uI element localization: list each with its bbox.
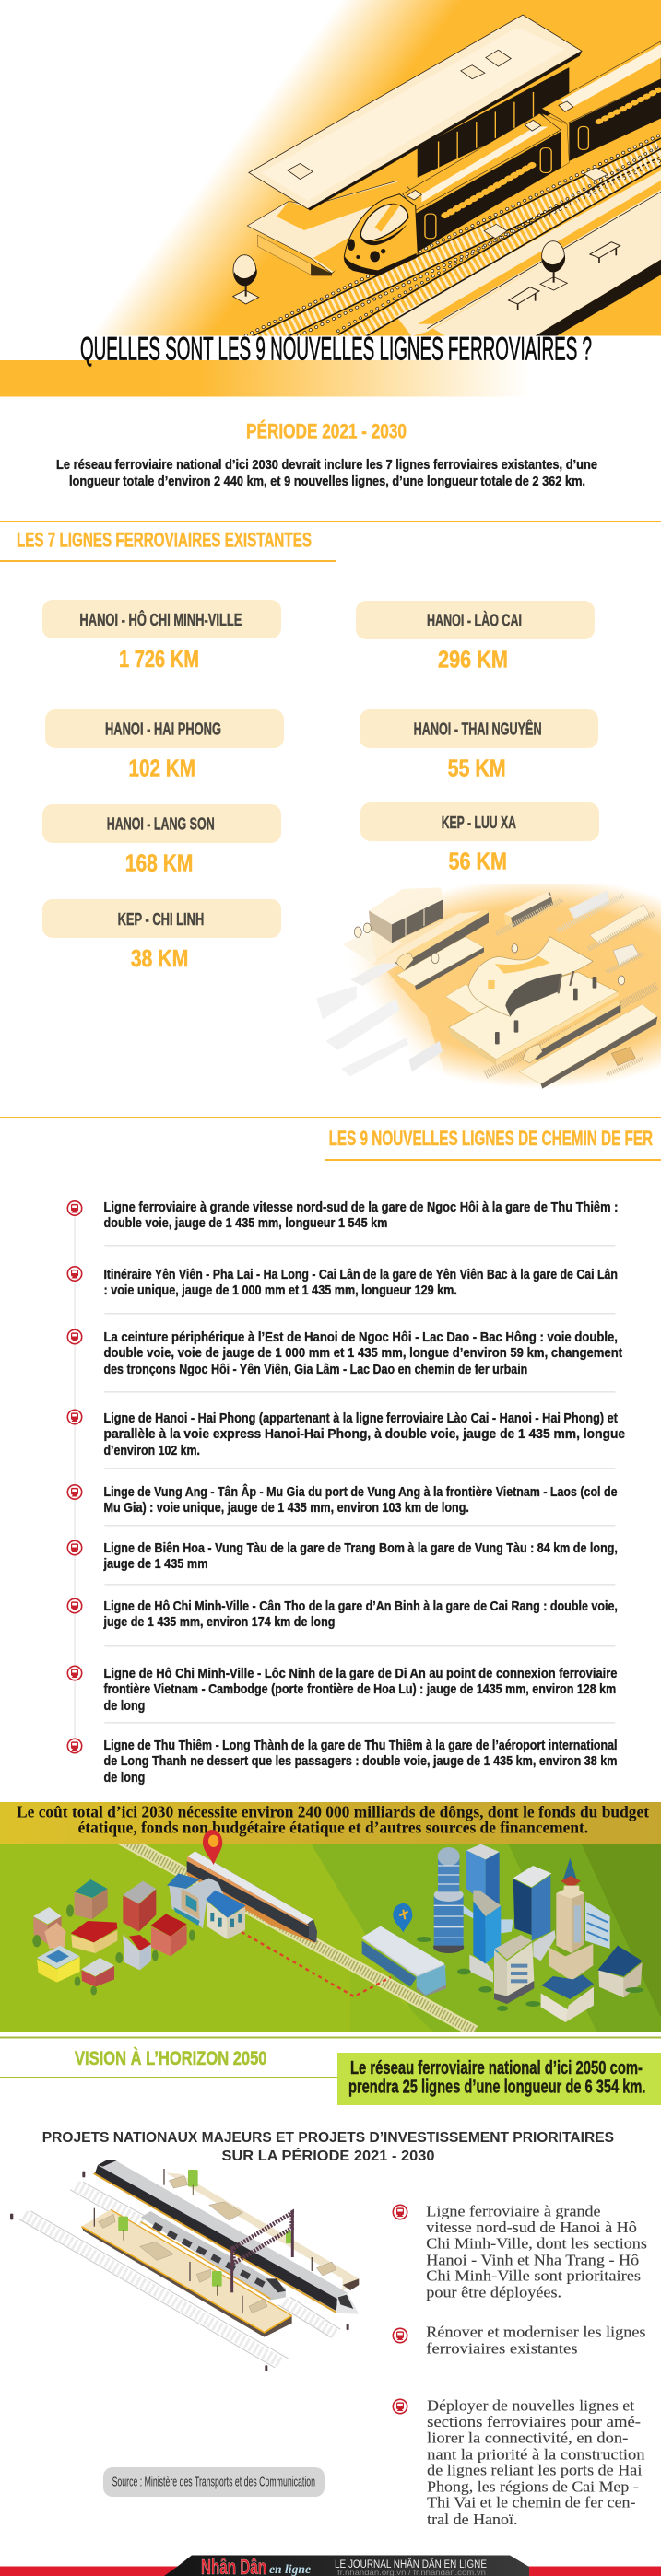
card: Hanoi - Hô Chi Minh-Ville: 1 726 KM [119,645,199,673]
heading: priority projects [42,2130,614,2164]
card: Hanoi - Thai Nguyên: HANOI - THAI NGUYÊN [414,719,542,739]
vision 2050 callout [337,2053,661,2105]
card: Hanoi - Hô Chi Minh-Ville [42,600,281,673]
card: Kep - Chi Linh [42,899,281,972]
bullet 1: Hanoi - Vinh et Nha Trang - Hô [426,2252,639,2268]
card: Hanoi - Lào Cai: 296 KM [438,646,508,673]
cost banner: Le coût total d’ici 2030 nécessite environ 240 000 milliards de dôngs, dont le fonds du budget [17,1802,649,1821]
footer [0,2555,661,2576]
card: Hanoi - Lang Son [42,804,281,877]
intro text [56,458,597,489]
card: Kep - Luu Xa: 56 KM [448,848,507,875]
bullet 2: Rénover et moderniser les lignes [426,2324,645,2340]
list item 3: des tronçons Ngoc Hôi - Yên Viên, Gia Lâm - Lac Dao en chemin de fer urbain [103,1362,527,1377]
card: Hanoi - Hai Phong: 102 KM [129,755,195,782]
list item 6 [67,1540,618,1572]
bullet 3: Déployer de nouvelles lignes et [427,2397,634,2415]
decorative gradient band under title [0,360,661,396]
bullet 3: sections ferroviaires pour amé- [427,2413,641,2430]
bullet 3: tral de Hanoï. [427,2511,518,2528]
card: Hanoi - Lang Son: HANOI - LANG SON [107,815,215,834]
list item 9 [67,1738,618,1786]
source pill [103,2467,325,2497]
list item 2: : voie unique, jauge de 1 000 mm et 1 435 mm, longueur 129 km. [103,1282,457,1298]
city station illustration [304,884,661,1096]
card: Hanoi - Lào Cai [356,601,595,673]
card: Hanoi - Hai Phong: HANOI - HAI PHONG [105,720,221,739]
bullet 3: nant la priorité à la construction [427,2446,645,2464]
bullet 1 [393,2202,647,2301]
bullet 3: liorer la connectivité, en don- [427,2430,629,2447]
bullet 3: de lignes reliant les ports de Hai [427,2462,643,2479]
heading: existing lines: LES 7 LIGNES FERROVIAIRES EXISTANTES [17,529,312,551]
list item 1 [67,1200,618,1231]
bullet 1: pour être déployées. [426,2283,561,2301]
card: Hanoi - Lang Son: 168 KM [125,849,193,877]
bullet 2: ferroviaires existantes [426,2339,577,2357]
source pill: Source : Ministère des Transports et des Communication [112,2475,315,2489]
bullet 3 [393,2397,645,2528]
cost banner: étatique, fonds non budgétaire étatique et d’autres sources de financement. [78,1819,588,1837]
green panel illustration: city to station [0,1802,661,2032]
list item 7 [67,1598,618,1630]
list item 1: double voie, jauge de 1 435 mm, longueur 1 545 km [103,1215,387,1231]
list item 9: de long [103,1770,145,1786]
list item 7: juge de 1 435 mm, environ 174 km de long [103,1614,335,1630]
footer text: LE JOURNAL NHÂN DÂN EN LIGNE [335,2558,487,2570]
bullet 2 [393,2324,645,2357]
card: Hanoi - Hai Phong [45,709,284,782]
heading: priority projects: SUR LA PÉRIODE 2021 - 2030 [221,2147,435,2164]
card: Kep - Luu Xa [360,802,599,875]
list item 4: d’environ 102 km. [103,1443,200,1458]
list item 5: Mu Gia) : voie unique, jauge de 1 435 mm, environ 103 km de long. [103,1500,469,1516]
card: Hanoi - Hô Chi Minh-Ville: HANOI - HÔ CHI MINH-VILLE [79,610,242,629]
bullet 3: Phong, les régions de Cai Mep - [427,2478,639,2496]
list item 3 [67,1329,622,1377]
bullet 1: Ligne ferroviaire à grande [426,2202,601,2219]
list item 4 [67,1410,625,1458]
illustration: two trains at platforms [10,2160,359,2371]
list timeline: 9 new lines [67,1200,625,1786]
card: Kep - Luu Xa: KEP - LUU XA [442,814,516,832]
heading: priority projects: PROJETS NATIONAUX MAJEURS ET PROJETS D’INVESTISSEMENT PRIORITAIRES [42,2130,614,2146]
period heading: PÉRIODE 2021 - 2030 [246,420,407,442]
card: Hanoi - Thai Nguyên: 55 KM [448,755,506,782]
bullet 1: vitesse nord-sud de Hanoi à Hô [426,2219,637,2236]
heading: vision 2050: VISION À L’HORIZON 2050 [75,2048,267,2069]
list item 6: jauge de 1 435 mm [103,1556,208,1572]
footer text [335,2558,487,2576]
bullet 3: Thi Vai et le chemin de fer cen- [427,2494,636,2512]
cost banner [0,1802,661,1844]
hero illustration: train station [94,0,661,335]
list item 5 [67,1483,618,1516]
card: Kep - Chi Linh: 38 KM [131,944,188,972]
list item 8: de long [103,1698,145,1714]
list item 4: parallèle à la voie express Hanoi-Hai Phong, à double voie, jauge de 1 435 mm, longue [103,1426,625,1442]
card: Hanoi - Thai Nguyên [360,709,598,782]
list item 2 [67,1267,618,1298]
bullet 1: Chi Minh-Ville sont prioritaires [426,2267,641,2285]
card: Hanoi - Lào Cai: HANOI - LÀO CAI [427,611,522,630]
card: Kep - Chi Linh: KEP - CHI LINH [118,910,204,929]
intro text: Le réseau ferroviaire national d’ici 2030 devrait inclure les 7 lignes ferroviaires existantes, d’une [56,458,597,473]
bullet 1: Chi Minh-Ville, dont les sections [426,2235,647,2253]
list item 8 [67,1666,618,1714]
intro text: longueur totale d’environ 2 440 km, et 9 nouvelles lignes, d’une longueur totale de 2 362 km. [69,474,585,489]
icon: red location pin [203,1830,222,1865]
